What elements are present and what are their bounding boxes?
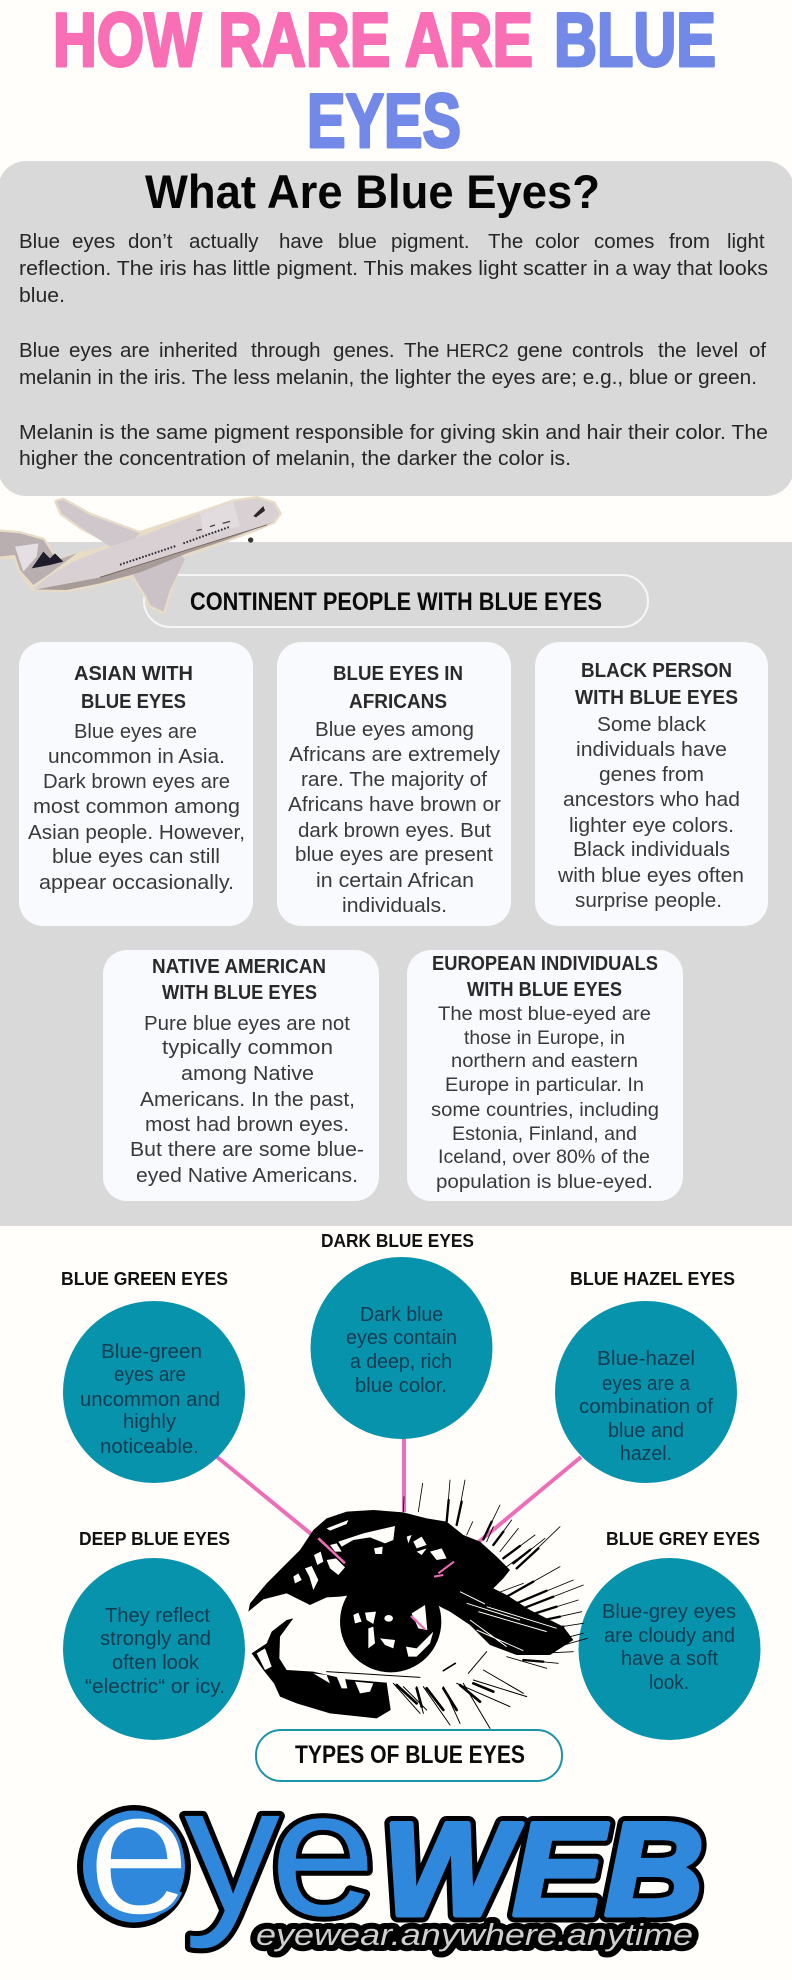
text block: light reflection: blue.: [19, 284, 65, 307]
card: asian: Blue eyes are: [74, 721, 197, 743]
circle: dark blue eyes: DARK BLUE EYES: [321, 1230, 474, 1251]
logo wordmark weight: WEB: [382, 1796, 704, 1944]
card: asian: Asian people. However,: [28, 822, 245, 844]
text block: light reflection: eyes: [72, 230, 115, 253]
circle: dark blue eyes: [310, 1230, 492, 1439]
card: black person: lighter eye colors.: [569, 815, 734, 837]
card: asian: Dark brown eyes are: [43, 771, 230, 793]
card: european: Europe in particular. In: [445, 1075, 644, 1096]
card: black person: individuals have: [576, 739, 727, 761]
card: africans: [277, 642, 511, 926]
circle: blue green eyes: highly: [123, 1411, 176, 1433]
card: native american: eyed Native Americans.: [136, 1165, 358, 1187]
text block: light reflection: reflection. The iris has little pigment. This makes light scatter in a way that looks: [19, 257, 768, 280]
text block: inheritance: eyes: [69, 339, 112, 362]
circle: blue hazel eyes: hazel.: [620, 1443, 672, 1465]
text block: light reflection: light: [727, 230, 765, 253]
circle: blue hazel eyes: combination of: [579, 1396, 713, 1418]
card: european: population is blue-eyed.: [436, 1172, 653, 1193]
card: africans: Africans are extremely: [289, 744, 500, 766]
card: european: Iceland, over 80% of the: [438, 1147, 650, 1168]
circle: dark blue eyes: Dark blue: [360, 1304, 443, 1326]
card: native american: most had brown eyes.: [145, 1114, 349, 1136]
logo: eyeweb: y: [184, 1749, 280, 1950]
text block: inheritance: are: [120, 339, 150, 362]
card: native american: WITH BLUE EYES: [162, 982, 317, 1004]
circle: deep blue eyes: [63, 1528, 245, 1740]
card: native american: Pure blue eyes are not: [144, 1013, 350, 1035]
card: black person: WITH BLUE EYES: [575, 687, 738, 709]
card: european: Estonia, Finland, and: [452, 1124, 637, 1145]
card: africans: in certain African: [316, 870, 474, 892]
circle: blue hazel eyes: [555, 1268, 737, 1483]
circle: blue green eyes: [61, 1268, 245, 1483]
card: asian: ASIAN WITH: [74, 663, 193, 685]
card: africans: AFRICANS: [349, 691, 447, 713]
text block: light reflection: from: [669, 230, 710, 253]
card: africans: blue eyes are present: [295, 844, 493, 866]
white lash streaks: [460, 1578, 557, 1651]
heading pill: continent people: [144, 575, 648, 627]
card: asian: appear occasionally.: [39, 872, 234, 894]
logo: eyeweb: e: [87, 1752, 191, 1953]
text block: inheritance: level: [696, 339, 738, 362]
circle: blue hazel eyes: eyes are a: [602, 1373, 691, 1395]
card: black person: genes from: [599, 764, 704, 786]
text block: inheritance: HERC2: [446, 340, 509, 361]
card: black person: BLACK PERSON: [581, 660, 732, 682]
iris: [340, 1571, 441, 1672]
circle: blue green eyes: eyes are: [114, 1364, 186, 1386]
card: black person: Some black: [597, 714, 707, 736]
title: EYES: [307, 79, 461, 164]
card: native american: [103, 950, 379, 1201]
circle: deep blue eyes: They reflect: [105, 1605, 210, 1627]
circle: dark blue eyes: eyes contain: [346, 1327, 457, 1349]
card: africans: BLUE EYES IN: [333, 663, 463, 685]
circle: blue green eyes: noticeable.: [100, 1436, 199, 1458]
text block: light reflection: actually: [189, 230, 259, 253]
card: european: WITH BLUE EYES: [467, 979, 622, 1001]
card: black person: Black individuals: [573, 839, 730, 861]
card: asian: BLUE EYES: [81, 691, 186, 713]
circle: dark blue eyes: a deep, rich: [350, 1351, 452, 1373]
text block: light reflection: have: [279, 230, 323, 253]
logo: eyeweb: e: [270, 1753, 376, 1954]
circle: blue hazel eyes: BLUE HAZEL EYES: [570, 1268, 735, 1289]
card: european: those in Europe, in: [464, 1028, 625, 1049]
text block: inheritance: melanin in the iris. The less melanin, the lighter the eyes are; e.g., blue or green.: [19, 366, 757, 389]
card: black person: [535, 642, 768, 926]
heading pill: continent people: CONTINENT PEOPLE WITH BLUE EYES: [190, 588, 602, 616]
circle: blue grey eyes: have a soft: [621, 1648, 718, 1670]
highlights: [272, 1520, 447, 1657]
card: european: [407, 950, 683, 1201]
logo tagline: eyewear.anywhere.anytime: [256, 1917, 693, 1952]
text block: light reflection: The: [488, 230, 523, 253]
card: africans: dark brown eyes. But: [298, 820, 491, 842]
card: native american: typically common: [162, 1037, 333, 1059]
title: [53, 0, 716, 164]
circle: blue hazel eyes: Blue-hazel: [597, 1348, 695, 1370]
text block: inheritance: through: [251, 339, 321, 362]
card: africans: Blue eyes among: [315, 719, 474, 741]
lower lashes: [327, 1652, 527, 1728]
icon: eye illustration: [248, 1480, 587, 1728]
lower lid: [252, 1618, 391, 1718]
text block: light reflection: don’t: [128, 230, 173, 253]
text block: light reflection: [19, 230, 768, 307]
circle: blue grey eyes: Blue-grey eyes: [602, 1601, 736, 1623]
card: european: EUROPEAN INDIVIDUALS: [432, 953, 658, 975]
text block: light reflection: comes: [594, 230, 654, 253]
card: european: some countries, including: [431, 1100, 659, 1121]
card: native american: Americans. In the past,: [140, 1089, 355, 1111]
text block: melanin: higher the concentration of melanin, the darker the color is.: [19, 447, 571, 470]
circle: blue grey eyes: are cloudy and: [604, 1625, 735, 1647]
card: black person: ancestors who had: [563, 789, 740, 811]
text block: inheritance: The: [404, 339, 439, 362]
card: asian: most common among: [33, 796, 240, 818]
circle: blue hazel eyes: blue and: [608, 1420, 684, 1442]
heading pill: types of blue eyes: [256, 1730, 562, 1781]
text block: inheritance: [19, 339, 766, 389]
text block: inheritance: genes.: [333, 339, 395, 362]
text block: inheritance: of: [749, 339, 766, 362]
text block: light reflection: color: [535, 230, 580, 253]
card: asian: blue eyes can still: [52, 846, 220, 868]
card: native american: NATIVE AMERICAN: [152, 956, 326, 978]
upper lashes: [403, 1480, 587, 1668]
card: black person: surprise people.: [575, 890, 722, 912]
text block: light reflection: blue: [338, 230, 377, 253]
heading pill: types of blue eyes: TYPES OF BLUE EYES: [295, 1741, 525, 1769]
text block: melanin: Melanin is the same pigment responsible for giving skin and hair their color. The: [19, 421, 768, 444]
text block: inheritance: gene: [517, 339, 563, 362]
card: native american: among Native: [181, 1063, 314, 1085]
card: native american: But there are some blue-: [130, 1139, 364, 1161]
card: european: The most blue-eyed are: [438, 1004, 651, 1025]
connector lines: [217, 1438, 581, 1631]
card: africans: individuals.: [342, 895, 447, 917]
panel: continent people with blue eyes: [0, 542, 792, 1226]
brow and upper lid mass: [248, 1510, 573, 1655]
text block: inheritance: Blue: [19, 339, 60, 362]
logo: eyeweb: [77, 1749, 704, 1954]
panel: what are blue eyes: [0, 161, 792, 496]
circle: blue green eyes: Blue-green: [101, 1341, 202, 1363]
logo: eyeweb: WEB: [382, 1796, 704, 1944]
circle: blue green eyes: uncommon and: [80, 1389, 220, 1411]
circle: blue grey eyes: [578, 1528, 760, 1740]
text block: inheritance: the: [658, 339, 686, 362]
text block: inheritance: controls: [572, 339, 644, 362]
card: asian: uncommon in Asia.: [48, 746, 225, 768]
card: black person: with blue eyes often: [557, 865, 744, 887]
card: africans: rare. The majority of: [301, 769, 487, 791]
circle: deep blue eyes: often look: [112, 1652, 200, 1674]
circle: deep blue eyes: strongly and: [100, 1628, 211, 1650]
card: european: northern and eastern: [451, 1051, 638, 1072]
title: HOW RARE ARE: [53, 0, 533, 83]
heading: what are blue eyes: What Are Blue Eyes?: [145, 165, 600, 218]
card: africans: Africans have brown or: [288, 794, 501, 816]
circle: dark blue eyes: blue color.: [355, 1375, 447, 1397]
card: asian: [19, 642, 253, 926]
text block: melanin: [19, 421, 768, 470]
title: BLUE: [554, 0, 716, 83]
text block: light reflection: Blue: [19, 230, 60, 253]
circle: blue grey eyes: look.: [649, 1672, 689, 1694]
circle: deep blue eyes: DEEP BLUE EYES: [79, 1528, 230, 1549]
circle: blue grey eyes: BLUE GREY EYES: [606, 1528, 760, 1549]
circle: deep blue eyes: “electric“ or icy.: [85, 1676, 225, 1698]
circle: blue green eyes: BLUE GREEN EYES: [61, 1268, 228, 1289]
icon: airplane: [0, 498, 279, 612]
text block: light reflection: pigment.: [391, 230, 470, 253]
text block: inheritance: inherited: [159, 339, 238, 362]
